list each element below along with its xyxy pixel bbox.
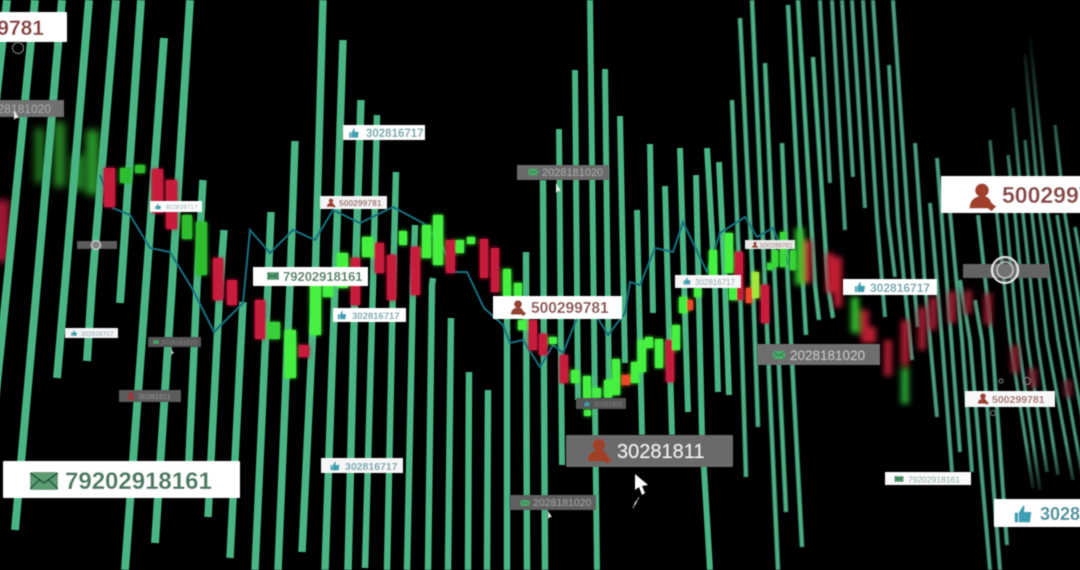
label: mail 2028181020 gray right xyxy=(757,344,880,365)
bar chart: receding bars to the right xyxy=(732,0,1080,570)
label: thumbs 302816717 right: 302816717 xyxy=(870,281,930,295)
label: user small right of centre: 500299781 xyxy=(760,242,793,250)
label: thumbs 302816717 mid xyxy=(333,308,406,322)
label: user 30281811 gray: 30281811 xyxy=(617,441,704,463)
label: thumbs 302816717 right of centre xyxy=(675,275,741,288)
label: user 500299781 top left xyxy=(0,12,67,42)
label: thumbs small lower left xyxy=(65,328,118,338)
label: mail 79202918161: 79202918161 xyxy=(283,269,363,284)
icon: small cursors xyxy=(14,110,561,519)
icon: large cursor xyxy=(633,474,648,508)
label: mail 79202918161 large: 79202918161 xyxy=(65,468,212,495)
label: mail 79202918161 xyxy=(253,267,368,286)
label: user 500299781 lower right xyxy=(965,391,1055,407)
label: thumbs 302816717 large bottom right xyxy=(994,499,1080,527)
mouse cursors and small markers xyxy=(12,42,1030,519)
label: thumbs small lower left: 302816717 xyxy=(81,331,114,338)
label: thumbs 302816717 lower xyxy=(321,458,403,473)
label: thumbs small left xyxy=(150,201,202,212)
label: user 500299781 small centre xyxy=(320,196,387,209)
label: mail 79202918161 large xyxy=(3,461,240,498)
label: gray with target circle right xyxy=(963,257,1049,283)
label: mail 2028181020 gray lower xyxy=(510,495,596,510)
line chart: teal trend line xyxy=(100,175,800,367)
bar chart: green volume bars xyxy=(0,0,729,570)
label: mail 2028181020 left gray xyxy=(0,100,64,117)
label: thumbs gray small under candles xyxy=(576,398,626,409)
label: mail 2028181020 gray lower: 2028181020 xyxy=(533,497,592,509)
label: thumbs 302816717 mid: 302816717 xyxy=(352,311,400,322)
label: user 500299781 lower right: 500299781 xyxy=(992,394,1045,406)
label: user 500299781 centre xyxy=(493,296,622,319)
label: thumbs 302816717 right of centre: 302816717 xyxy=(695,278,736,287)
candlesticks: out of focus left group xyxy=(0,122,99,262)
label: thumbs 302816717 lower: 302816717 xyxy=(345,461,398,473)
label: mail small gray left xyxy=(148,337,201,347)
candlesticks: in focus centre group xyxy=(104,165,796,416)
candlesticks: out of focus right group xyxy=(795,228,1072,404)
label: mail small gray left: 2028181020 xyxy=(161,340,198,346)
label: user 500299781 small centre: 500299781 xyxy=(339,198,382,208)
label: gray small with target circle xyxy=(77,240,117,250)
label: mail 79202918161 lower right xyxy=(885,472,971,485)
label: mail 2028181020 gray centre: 2028181020 xyxy=(542,167,603,179)
label: user 500299781 large right xyxy=(941,176,1080,213)
label: user 500299781 centre: 500299781 xyxy=(531,300,609,317)
label: thumbs gray small under candles: 30281811 xyxy=(594,401,623,408)
label: thumbs 302816717 right xyxy=(843,279,937,295)
label: thumbs 302816717 top centre xyxy=(343,125,425,140)
label: thumbs small left: 302816717 xyxy=(165,204,198,211)
label: user gray small left: 30281811 xyxy=(138,392,171,401)
label: thumbs 302816717 top centre: 302816717 xyxy=(366,128,424,140)
label: mail 79202918161 lower right: 79202918161 xyxy=(908,474,960,484)
label: mail 2028181020 gray right: 2028181020 xyxy=(790,348,865,363)
label: user small right of centre xyxy=(745,240,795,250)
label: user 30281811 gray xyxy=(566,435,733,467)
label: user gray small left xyxy=(119,390,181,402)
label: mail 2028181020 gray centre xyxy=(517,165,609,180)
icon: small target circles xyxy=(12,42,1030,416)
